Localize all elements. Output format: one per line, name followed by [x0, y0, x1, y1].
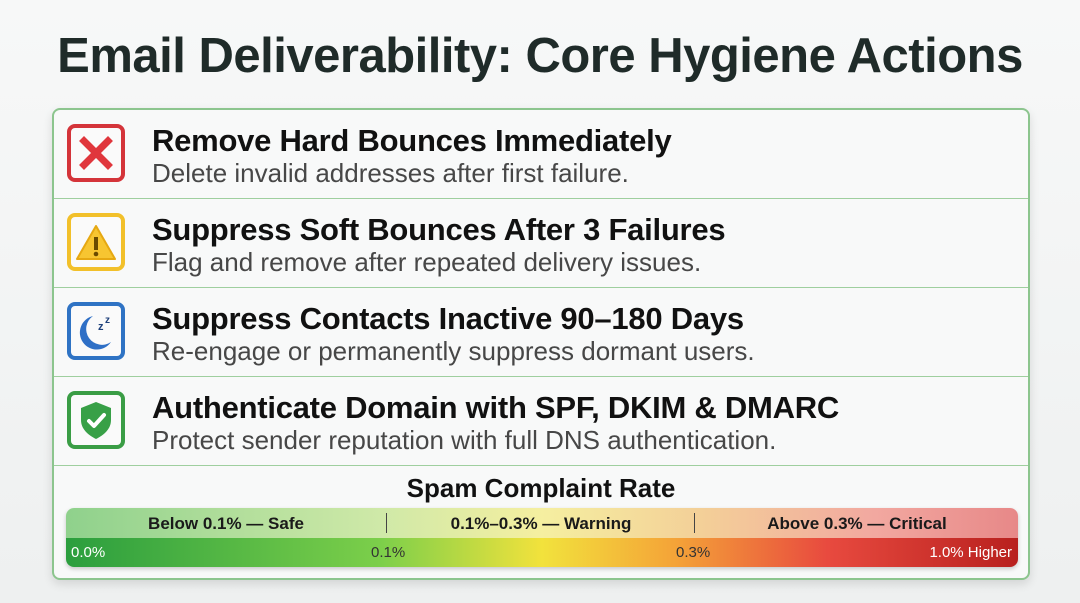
row: inactive [54, 288, 1028, 377]
heading: spam complaint rate: Spam Complaint Rate [407, 473, 675, 503]
gradient scale: 0.0% [71, 544, 105, 561]
zone labels: Below 0.1% — Safe [148, 514, 304, 533]
zone labels: 0.1%–0.3% — Warning [451, 514, 631, 533]
row: hard bounces [54, 110, 1028, 199]
row: authenticate [54, 377, 1028, 466]
heading: Remove Hard Bounces Immediately [152, 123, 671, 158]
text: Delete invalid addresses after first failure. [152, 158, 629, 188]
heading: Suppress Contacts Inactive 90–180 Days [152, 301, 744, 336]
icon: moon [67, 302, 125, 360]
gradient scale: 1.0% Higher [929, 544, 1012, 561]
icon: moon: z [98, 321, 104, 333]
icon: red x [67, 124, 125, 182]
icon: shield [67, 391, 125, 449]
heading: Authenticate Domain with SPF, DKIM & DMARC [152, 390, 839, 425]
title: Email Deliverability: Core Hygiene Actions [57, 29, 1023, 83]
text: Flag and remove after repeated delivery issues. [152, 247, 701, 277]
text: Re-engage or permanently suppress dormant users. [152, 336, 755, 366]
text: Protect sender reputation with full DNS authentication. [152, 425, 776, 455]
panel: actions [52, 108, 1030, 580]
icon: moon: z [105, 315, 110, 326]
gradient scale [66, 538, 1018, 567]
gradient scale: 0.3% [676, 544, 710, 561]
heading: Suppress Soft Bounces After 3 Failures [152, 212, 725, 247]
zone labels [66, 508, 1018, 538]
scale bar [66, 508, 1018, 567]
icon: warning [67, 213, 125, 271]
zone labels: Above 0.3% — Critical [767, 514, 947, 533]
row: soft bounces [54, 199, 1028, 288]
gradient scale: 0.1% [371, 544, 405, 561]
